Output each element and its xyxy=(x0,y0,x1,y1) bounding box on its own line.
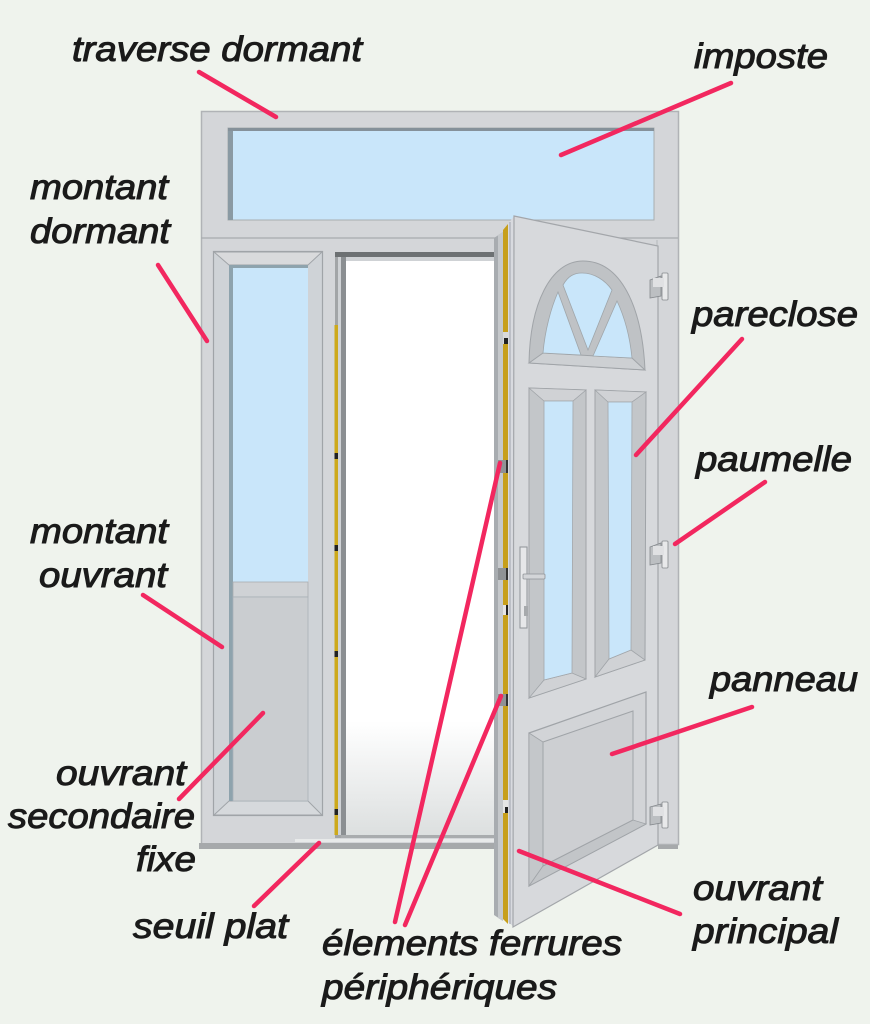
label: élements ferrures périphériques: périphériques xyxy=(321,968,557,1007)
upper left glazed panel xyxy=(529,388,586,698)
label: imposte: imposte xyxy=(694,37,828,76)
label: traverse dormant: traverse dormant xyxy=(72,30,363,69)
upper right glazed panel xyxy=(595,390,646,677)
icon: top hinge xyxy=(650,273,668,300)
leader lines xyxy=(143,72,765,925)
label: pareclose: pareclose xyxy=(691,295,858,334)
sidelight glass xyxy=(229,265,308,582)
label: ouvrant secondaire fixe: fixe xyxy=(136,840,196,879)
label: paumelle: paumelle xyxy=(695,440,852,479)
label: élements ferrures périphériques xyxy=(321,924,622,1007)
door frame xyxy=(199,112,678,849)
label: seuil plat: seuil plat xyxy=(133,907,289,946)
label: montant dormant: dormant xyxy=(30,212,171,251)
label: ouvrant secondaire fixe: ouvrant xyxy=(56,754,187,793)
transom glass (imposte) xyxy=(228,128,654,220)
label: montant ouvrant xyxy=(30,512,169,595)
label: montant ouvrant: ouvrant xyxy=(39,556,168,595)
door opening xyxy=(334,252,495,838)
label: élements ferrures périphériques: élements ferrures xyxy=(322,924,622,963)
open door leaf (ouvrant principal) xyxy=(513,216,658,927)
icon: bottom hinge xyxy=(650,802,668,828)
label: ouvrant secondaire fixe xyxy=(8,754,196,879)
label: panneau: panneau xyxy=(709,660,858,699)
door handle xyxy=(520,547,545,628)
label: ouvrant secondaire fixe: secondaire xyxy=(8,797,195,836)
sidelight (fixed secondary leaf) xyxy=(214,252,322,816)
label: montant dormant xyxy=(30,168,171,251)
label: ouvrant principal: principal xyxy=(692,912,839,951)
label: montant dormant: montant xyxy=(30,168,169,207)
sidelight panel xyxy=(233,582,308,597)
yellow gasket on frame xyxy=(334,325,338,835)
label: ouvrant principal xyxy=(692,869,839,951)
label: montant ouvrant: montant xyxy=(30,512,169,551)
icon: middle hinge xyxy=(650,541,668,568)
lower raised panel (panneau) xyxy=(529,692,646,886)
arched window xyxy=(529,261,645,370)
label: ouvrant principal: ouvrant xyxy=(693,869,823,908)
door jamb and hardware strip xyxy=(494,216,514,927)
